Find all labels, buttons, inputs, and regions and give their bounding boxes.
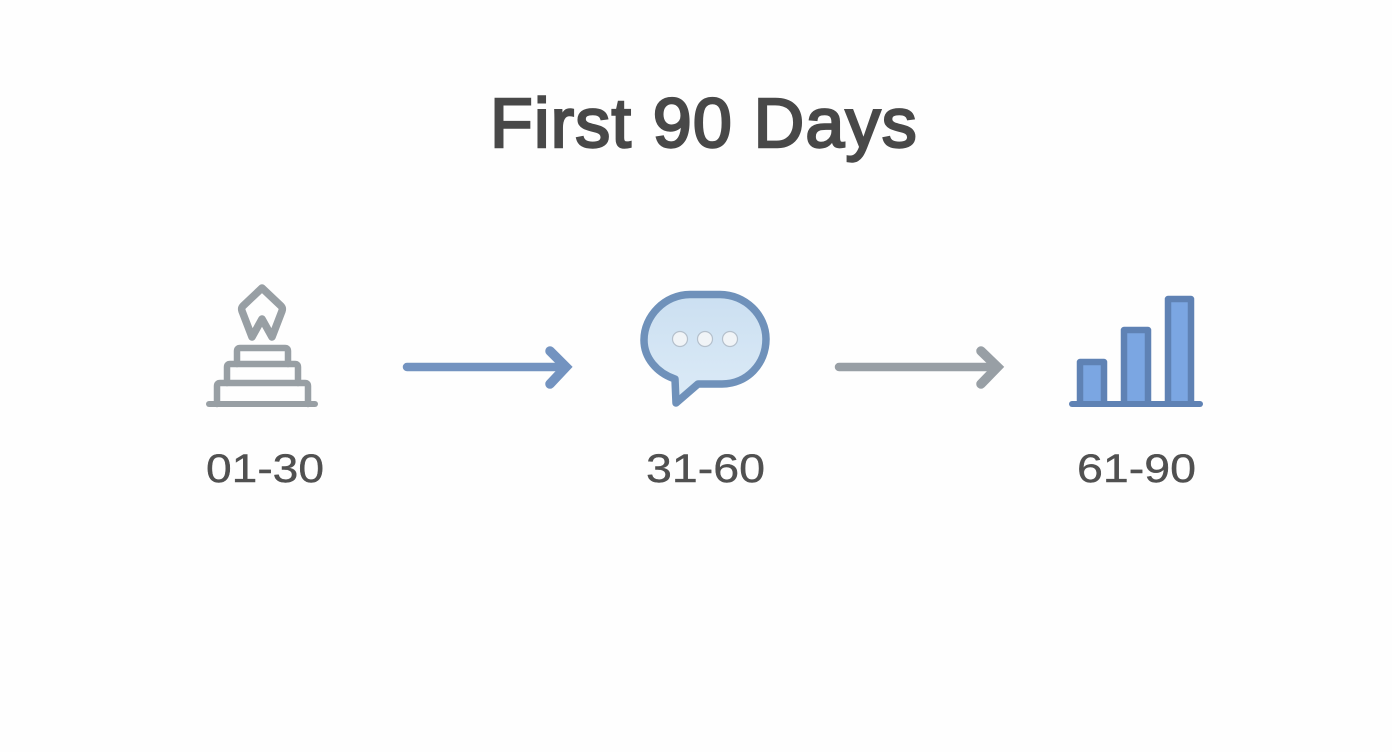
label: 31-60: 31-60 [646, 447, 765, 491]
label: 61-90: 61-90 [1077, 447, 1196, 491]
label: 01-30: 01-30 [206, 447, 324, 491]
icon: speech bubble [644, 294, 766, 403]
arrow: grey [839, 351, 998, 384]
title: First 90 Days [490, 84, 918, 162]
arrow: blue [407, 351, 566, 384]
icon: rising bar chart [1072, 299, 1200, 404]
icon: flame on stacked podium [209, 288, 315, 404]
